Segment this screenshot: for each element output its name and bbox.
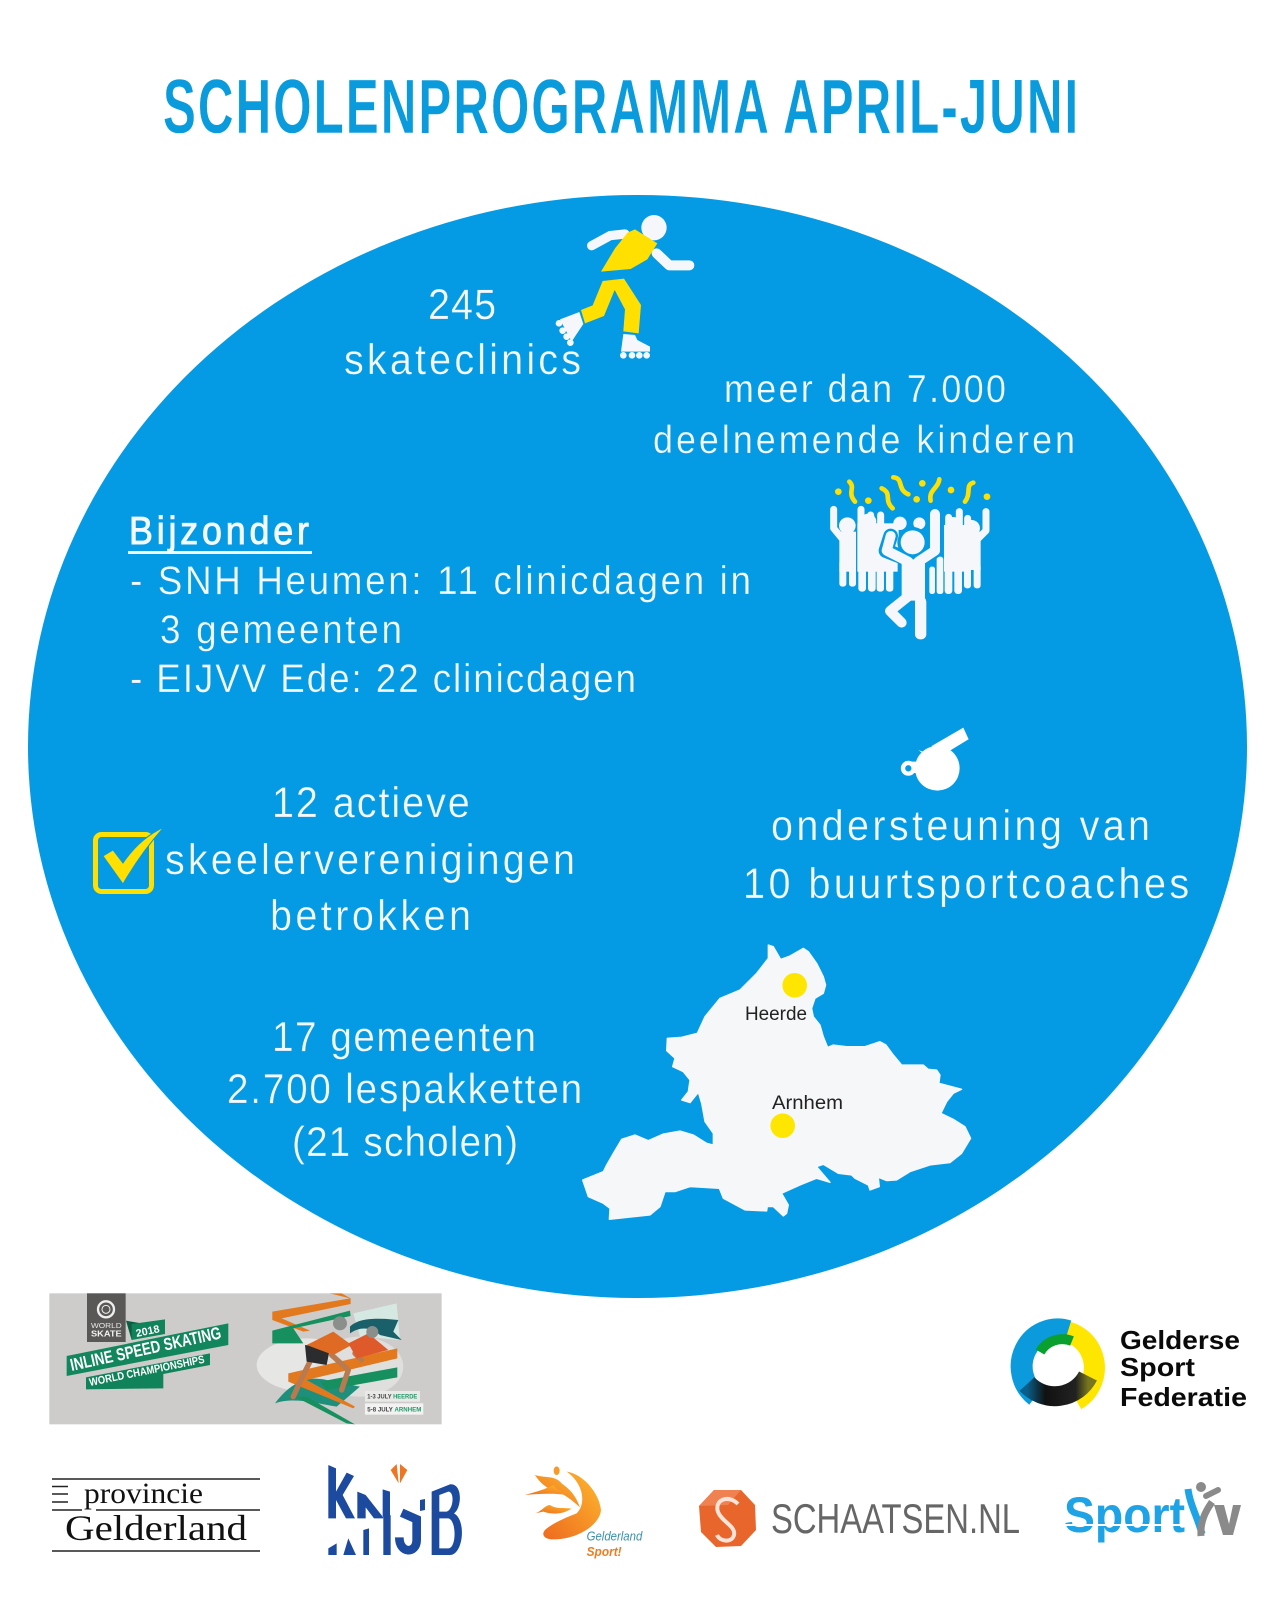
text block: Bijzonder [128, 509, 751, 701]
text: ondersteuning buurtsportcoaches: 10 buurtsportcoaches [743, 859, 1189, 907]
marker: Arnhem [770, 1113, 795, 1138]
logo: World Skate banner [49, 1293, 442, 1424]
logo: Sport TV [1064, 1482, 1241, 1543]
text block: Bijzonder: - EIJVV Ede: 22 clinicdagen [130, 657, 636, 701]
logo: World Skate banner: 2018 [135, 1323, 161, 1340]
icon: cheering crowd [834, 477, 990, 639]
text: meer dan 7.000 deelnemende kinderen: meer dan 7.000 [724, 367, 1006, 410]
text: skeelerverenigingen: 12 actieve [272, 778, 470, 826]
logo: Sport TV: Sport [1064, 1487, 1185, 1543]
title: SCHOLENPROGRAMMA APRIL-JUNI [163, 63, 1078, 150]
text: 245 skateclinics: 245 [428, 280, 496, 328]
logo: Gelderse Sport Federatie [1022, 1325, 1247, 1412]
text: gemeenten lespakketten scholen: 2.700 lespakketten [227, 1064, 582, 1112]
icon: inline skater [556, 215, 689, 359]
logo: World Skate banner: INLINE SPEED SKATING [68, 1323, 223, 1375]
map: Gelderland [583, 945, 971, 1219]
label: Heerde: Heerde [745, 1004, 807, 1025]
logo: Schaatsen.nl [699, 1490, 1020, 1547]
logo wordmark [1120, 1325, 1247, 1412]
logo: World Skate banner: SKATE [91, 1329, 122, 1338]
logo: World Skate banner: 1-3 JULY HEERDE [367, 1394, 418, 1401]
logo: provincie Gelderland [52, 1477, 260, 1551]
logo: Gelderland Sport: Gelderland [587, 1529, 643, 1544]
text: gemeenten lespakketten scholen [227, 1012, 582, 1165]
logo: Gelderland Sport [525, 1466, 643, 1559]
panel: blue ellipse [28, 195, 1247, 1298]
text: ondersteuning buurtsportcoaches: ondersteuning van [771, 801, 1150, 849]
logo wordmark: Federatie [1120, 1382, 1247, 1412]
logo wordmark: Gelderse [1120, 1325, 1240, 1355]
text: skeelerverenigingen: betrokken [270, 891, 471, 939]
text block: Bijzonder: 3 gemeenten [160, 608, 402, 652]
text: 245 skateclinics [344, 280, 581, 383]
text: gemeenten lespakketten scholen: 17 gemeenten [272, 1012, 536, 1060]
text: 245 skateclinics: skateclinics [344, 335, 581, 383]
text: ondersteuning buurtsportcoaches [743, 801, 1189, 907]
logo: Gelderland Sport: Sport! [587, 1544, 622, 1559]
text: meer dan 7.000 deelnemende kinderen [653, 367, 1075, 461]
logo wordmark: Sport [1120, 1352, 1195, 1382]
logo: World Skate banner: WORLD [91, 1321, 122, 1330]
logo: World Skate banner: WORLD CHAMPIONSHIPS [88, 1354, 206, 1389]
marker: Heerde [782, 973, 807, 998]
logo: provincie Gelderland: provincie [84, 1477, 203, 1510]
logo ring [1022, 1329, 1094, 1400]
logo: Schaatsen.nl: SCHAATSEN.NL [771, 1495, 1020, 1542]
text block: Bijzonder: Bijzonder [129, 509, 309, 552]
logo: KNSB [328, 1464, 462, 1555]
icon: whistle [903, 728, 969, 791]
text block: Bijzonder: - SNH Heumen: 11 clinicdagen in [130, 559, 751, 603]
label: Arnhem: Arnhem [772, 1093, 843, 1114]
text: skeelerverenigingen: skeelerverenigingen [165, 835, 575, 883]
logo: World Skate banner: 5-8 JULY ARNHEM [367, 1406, 422, 1413]
logo: provincie Gelderland: Gelderland [65, 1508, 247, 1548]
text: skeelerverenigingen [165, 778, 575, 939]
text: meer dan 7.000 deelnemende kinderen: deelnemende kinderen [653, 418, 1075, 461]
text: gemeenten lespakketten scholen: (21 scholen) [292, 1117, 518, 1165]
icon: yellow checkbox [96, 827, 164, 892]
